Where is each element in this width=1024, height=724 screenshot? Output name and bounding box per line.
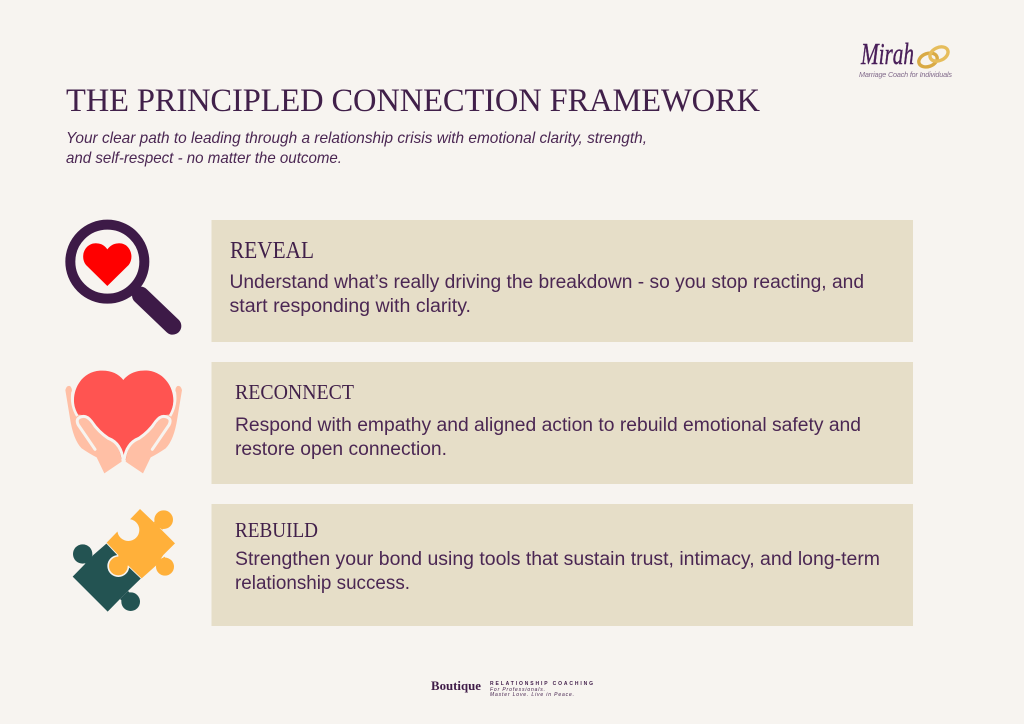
subtitle: and self-respect - no matter the outcome. (66, 150, 342, 167)
logo: Mirah (859, 36, 952, 79)
panel: reveal: start responding with clarity. (230, 296, 471, 317)
panel: reconnect: RECONNECT (235, 380, 354, 404)
logo: Mirah: Marriage Coach for Individuals (859, 70, 952, 79)
panel: rebuild: Strengthen your bond using tools that sustain trust, intimacy, and long-term (235, 549, 880, 570)
subtitle (66, 130, 647, 167)
panel: reconnect: Respond with empathy and aligned action to rebuild emotional safety and (235, 415, 861, 436)
footer logo: Boutique relationship coaching: For Professionals. (490, 687, 545, 693)
panel: reveal (212, 220, 913, 342)
footer logo: Boutique relationship coaching (431, 679, 593, 698)
panel: rebuild: relationship success. (235, 573, 410, 594)
panel: reveal: Understand what’s really driving the breakdown - so you stop reacting, and (230, 272, 864, 293)
footer logo: Boutique relationship coaching: Master Love. Live in Peace. (490, 692, 574, 698)
footer logo: Boutique relationship coaching: Boutique (431, 679, 481, 693)
panel: reconnect (212, 362, 913, 484)
panel: reconnect: restore open connection. (235, 439, 447, 460)
panel: rebuild: REBUILD (235, 518, 318, 542)
logo: Mirah: Mirah (860, 36, 914, 71)
panel: reveal: REVEAL (230, 238, 314, 264)
panel: rebuild (212, 504, 913, 626)
subtitle: Your clear path to leading through a relationship crisis with emotional clarity, strength, (66, 130, 647, 147)
title: THE PRINCIPLED CONNECTION FRAMEWORK (66, 83, 761, 119)
icon: magnifying glass with heart (70, 225, 173, 326)
icon: hands holding heart (65, 371, 182, 473)
footer logo: Boutique relationship coaching: RELATIONSHIP COACHING (490, 681, 593, 687)
icon: puzzle pieces (73, 509, 175, 612)
